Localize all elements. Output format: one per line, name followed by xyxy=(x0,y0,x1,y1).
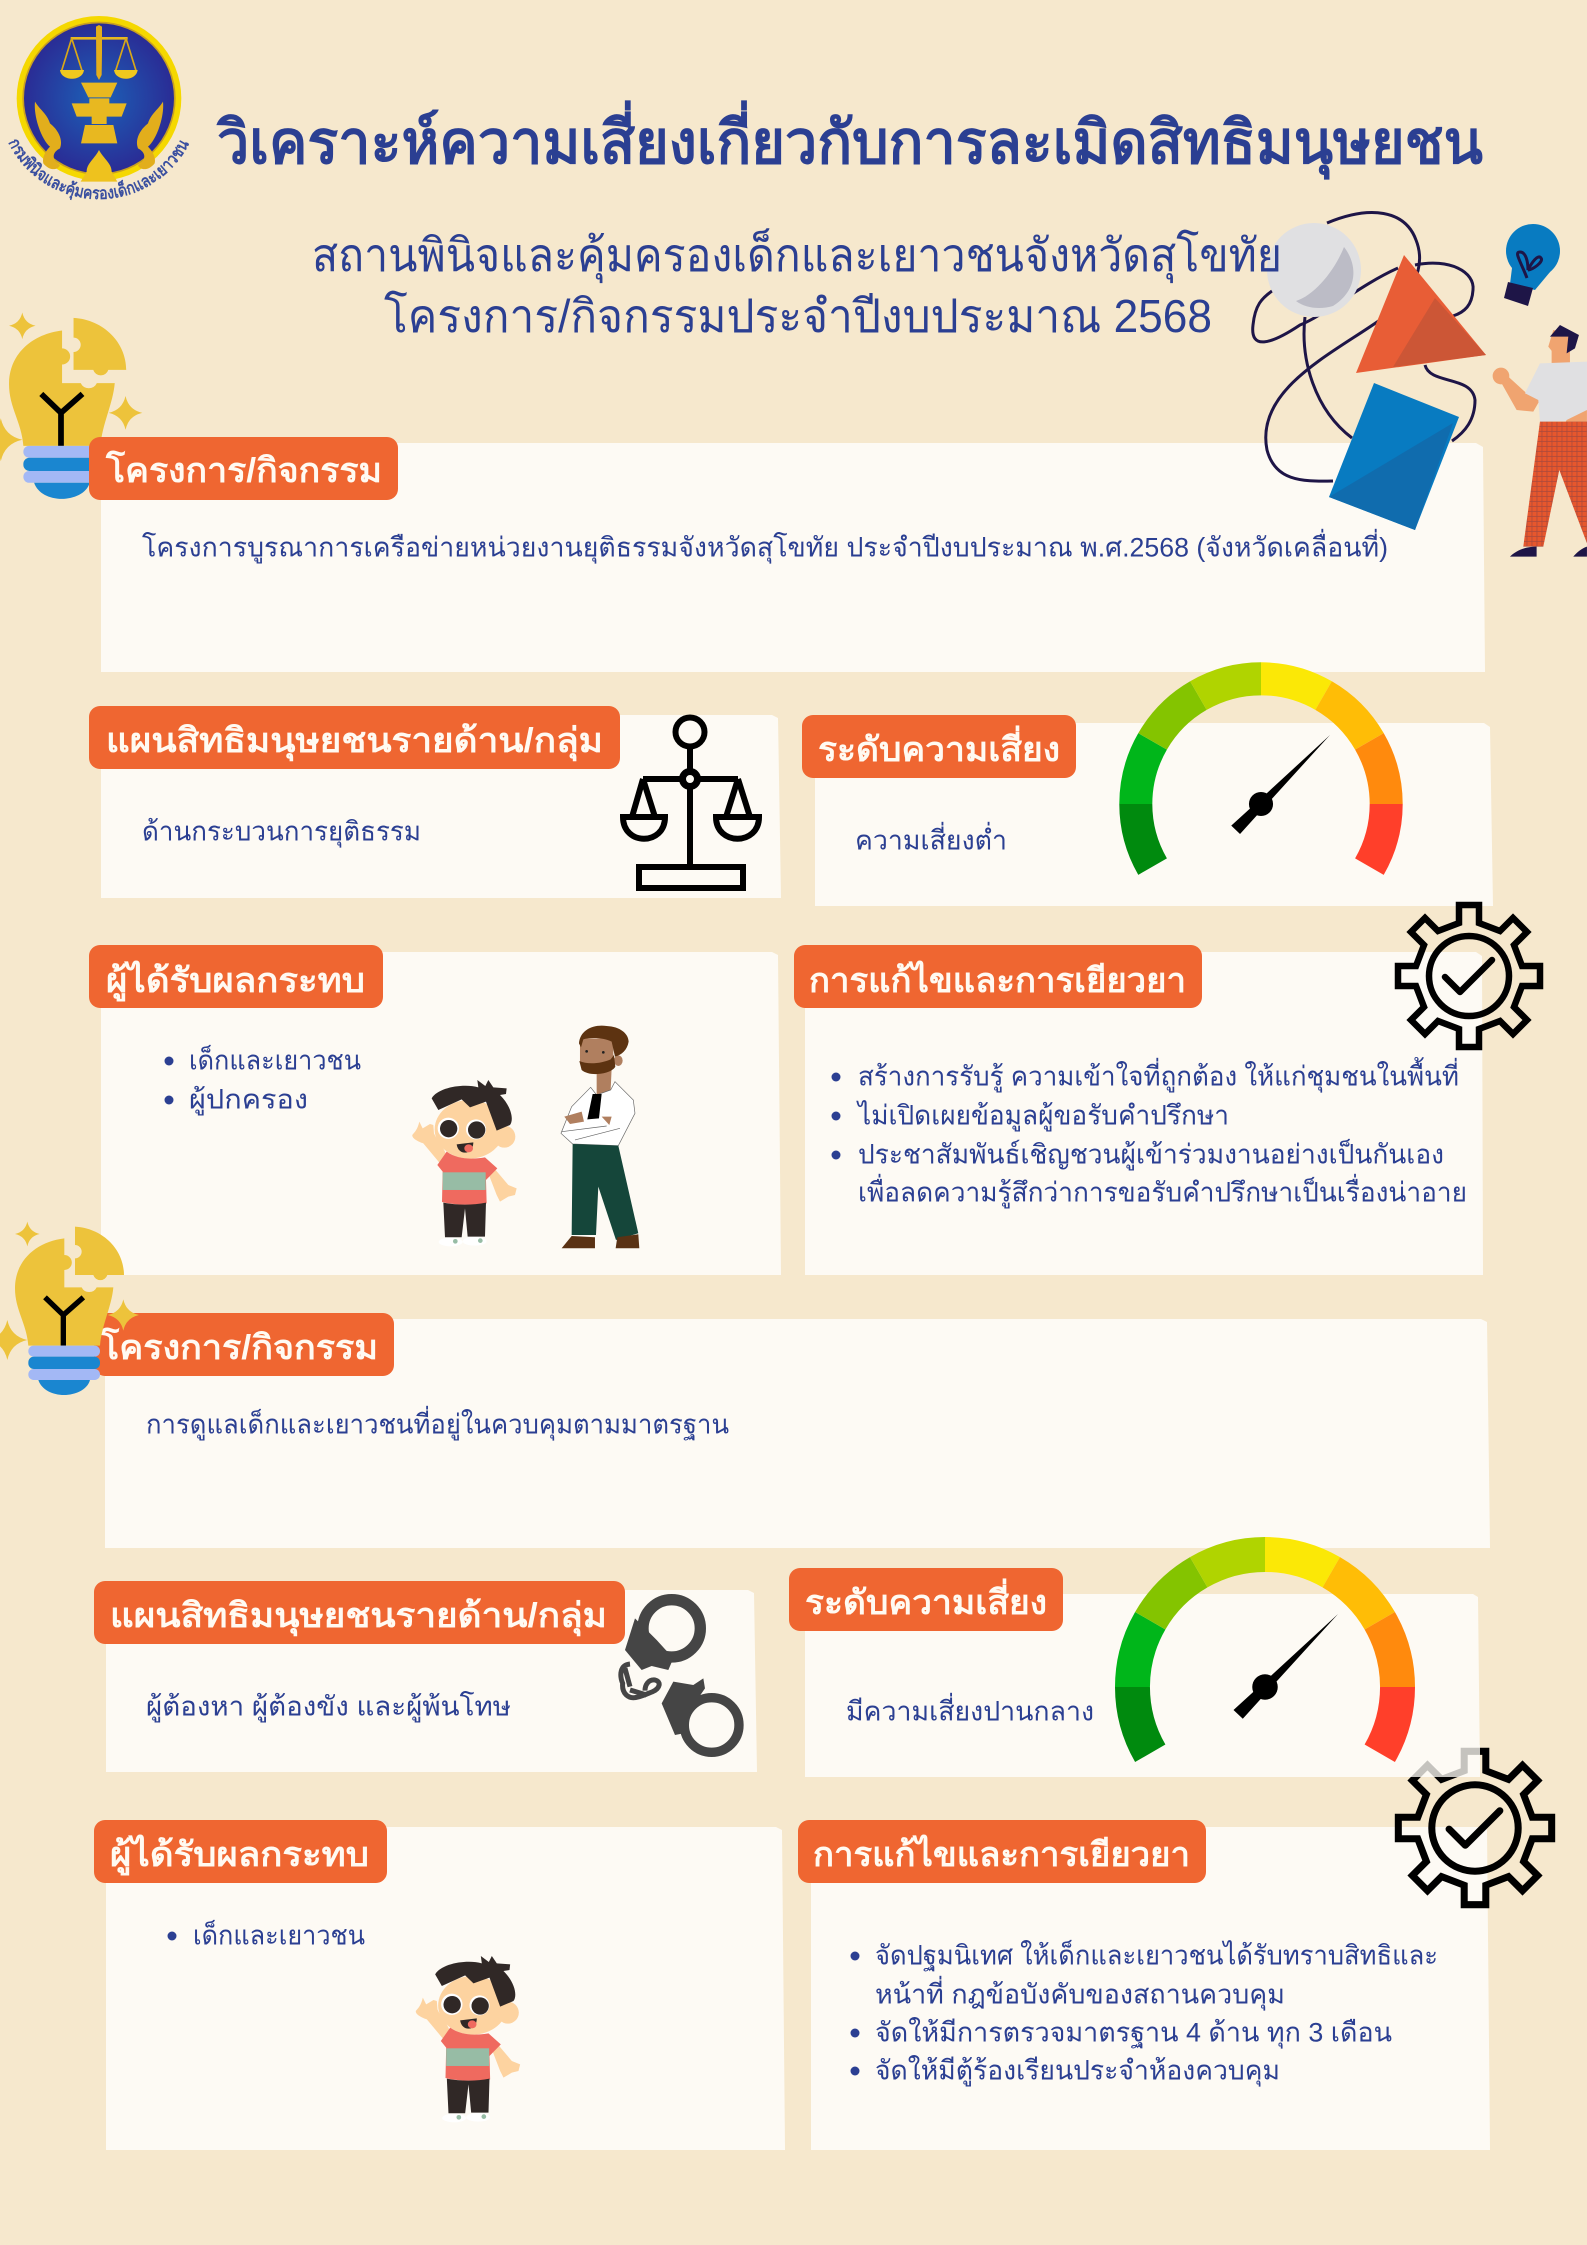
logo: department emblem xyxy=(8,16,189,200)
list: remedies: ประชาสัมพันธ์เชิญชวนผู้เข้าร่วมงานอย่างเป็นกันเอง xyxy=(858,1136,1444,1170)
illustration: child xyxy=(412,1080,517,1246)
icon: gear with check xyxy=(1398,905,1540,1047)
panel: affected people 1 xyxy=(89,945,781,1275)
heading: project xyxy=(94,1313,394,1376)
heading: affected people: ผู้ได้รับผลกระทบ xyxy=(106,960,365,1002)
list: remedies: จัดให้มีการตรวจมาตรฐาน 4 ด้าน ทุก 3 เดือน xyxy=(875,2016,1392,2050)
panel: project 2 xyxy=(94,1313,1490,1548)
list: remedies: เพื่อลดความรู้สึกว่าการขอรับคำปรึกษาเป็นเรื่องน่าอาย xyxy=(858,1174,1467,1208)
list: affected groups: ผู้ปกครอง xyxy=(189,1084,308,1116)
heading: plan: แผนสิทธิมนุษยชนรายด้าน/กลุ่ม xyxy=(106,722,603,762)
list: remedies xyxy=(832,1056,1467,1208)
panel: risk level 1 xyxy=(802,662,1493,906)
text: risk value: ความเสี่ยงต่ำ xyxy=(855,822,1007,856)
panel: project 1 xyxy=(89,437,1485,672)
list: remedies: ไม่เปิดเผยข้อมูลผู้ขอรับคำปรึกษา xyxy=(856,1100,1229,1132)
heading: risk level xyxy=(802,715,1076,778)
icon: puzzle light bulb xyxy=(0,313,142,499)
panel: human rights plan 1 xyxy=(89,706,781,898)
illustration: child xyxy=(416,1956,520,2122)
heading: affected people: ผู้ได้รับผลกระทบ xyxy=(110,1834,369,1876)
gauge: risk meter xyxy=(1119,662,1403,875)
heading: plan xyxy=(94,1581,625,1644)
icon: small blue bulb xyxy=(1504,224,1560,306)
panel: remedies 2 xyxy=(798,1820,1490,2150)
gauge: risk meter xyxy=(1115,1537,1415,1762)
list: remedies xyxy=(850,1938,1438,2088)
list: affected groups: เด็กและเยาวชน xyxy=(189,1042,361,1076)
text: project name: โครงการบูรณาการเครือข่ายหน่วยงานยุติธรรมจังหวัดสุโขทัย ประจำปีงบประมาณ พ.ศ.2568 (จังหวัดเคลื่อนที่) xyxy=(142,528,1388,564)
heading: risk level: ระดับความเสี่ยง xyxy=(818,725,1060,769)
heading: plan xyxy=(89,706,620,769)
panel: risk level 2 xyxy=(789,1537,1480,1777)
title: วิเคราะห์ความเสี่ยงเกี่ยวกับการละเมิดสิทธิมนุษยชน xyxy=(216,100,1483,180)
panel: affected people 2 xyxy=(94,1820,785,2150)
icon: handcuffs xyxy=(621,1600,739,1752)
illustration: standing person xyxy=(1493,325,1587,557)
subtitle: organisation: สถานพินิจและคุ้มครองเด็กและเยาวชนจังหวัดสุโขทัย xyxy=(312,228,1282,284)
text: plan detail: ผู้ต้องหา ผู้ต้องขัง และผู้พ้นโทษ xyxy=(146,1692,511,1722)
heading: project xyxy=(89,437,398,500)
illustration: adult with crossed arms xyxy=(561,1026,639,1248)
list: remedies: หน้าที่ กฎข้อบังคับของสถานควบคุม xyxy=(875,1976,1285,2012)
heading: project: โครงการ/กิจกรรม xyxy=(99,1327,378,1367)
heading: remedies: การแก้ไขและการเยียวยา xyxy=(813,1834,1190,1874)
icon: justice scales xyxy=(623,718,759,888)
heading: remedies: การแก้ไขและการเยียวยา xyxy=(809,960,1186,1000)
text: risk value: มีความเสี่ยงปานกลาง xyxy=(846,1692,1094,1726)
panel: human rights plan 2 xyxy=(94,1581,757,1772)
heading: plan: แผนสิทธิมนุษยชนรายด้าน/กลุ่ม xyxy=(110,1597,607,1637)
list: remedies: จัดให้มีตู้ร้องเรียนประจำห้องควบคุม xyxy=(875,2054,1280,2088)
list: affected groups xyxy=(164,1042,361,1116)
icon: puzzle light bulb second xyxy=(0,1222,139,1395)
heading: risk level xyxy=(789,1568,1063,1631)
text: plan detail: ด้านกระบวนการยุติธรรม xyxy=(142,816,421,848)
heading: remedies xyxy=(794,945,1202,1008)
icon: gear with check xyxy=(1398,1751,1552,1905)
list: remedies: สร้างการรับรู้ ความเข้าใจที่ถูกต้อง ให้แก่ชุมชนในพื้นที่ xyxy=(858,1056,1459,1094)
text: project name: การดูแลเด็กและเยาวชนที่อยู่ในควบคุมตามมาตรฐาน xyxy=(146,1406,729,1442)
heading: risk level: ระดับความเสี่ยง xyxy=(805,1578,1047,1622)
heading: affected people xyxy=(94,1820,387,1883)
illustration: abstract shapes xyxy=(1253,213,1486,530)
subtitle: fiscal year: โครงการ/กิจกรรมประจำปีงบประมาณ 2568 xyxy=(384,290,1212,342)
list: affected groups: เด็กและเยาวชน xyxy=(193,1918,365,1950)
heading: remedies xyxy=(798,1820,1206,1883)
panel: remedies 1 xyxy=(794,905,1540,1275)
heading: affected people xyxy=(89,945,383,1008)
heading: project: โครงการ/กิจกรรม xyxy=(105,450,382,490)
text: emblem caption: กรมพินิจและคุ้มครองเด็กและเยาวชน xyxy=(8,140,189,200)
list: remedies: จัดปฐมนิเทศ ให้เด็กและเยาวชนได้รับทราบสิทธิและ xyxy=(875,1938,1438,1972)
